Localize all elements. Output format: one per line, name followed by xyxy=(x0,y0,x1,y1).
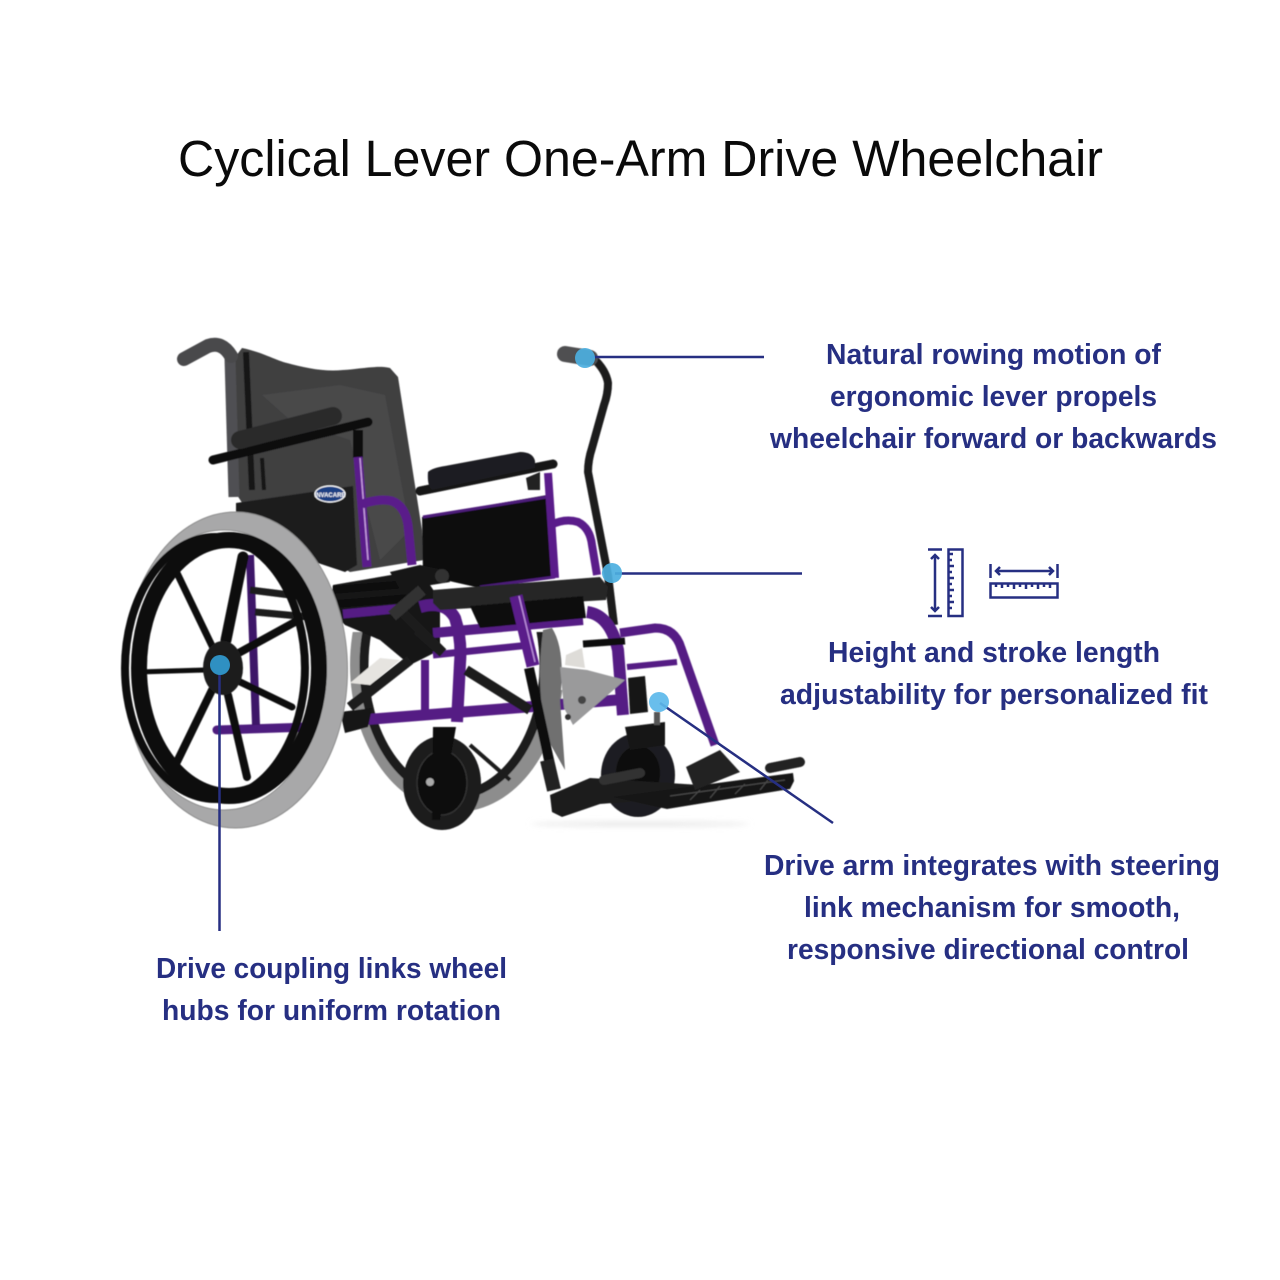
front tube xyxy=(516,596,554,790)
seat back sling panel: INVACARE xyxy=(315,493,345,499)
push handle xyxy=(184,345,234,497)
front caster far xyxy=(601,712,675,817)
drive motor block xyxy=(628,676,648,714)
floor shadow xyxy=(530,822,750,826)
far rear wheel xyxy=(349,631,563,810)
drive lever xyxy=(565,354,614,625)
callout text: drive coupling xyxy=(156,953,507,1027)
callout text: lever: ergonomic lever propels xyxy=(830,381,1157,413)
title: Cyclical Lever One-Arm Drive Wheelchair xyxy=(178,130,1103,187)
callout line: hub xyxy=(218,672,221,931)
near rear wheel xyxy=(124,512,348,828)
callout text: adjustability: Height and stroke length xyxy=(828,637,1160,669)
steering plate xyxy=(540,628,625,770)
callout line: steering link xyxy=(660,703,833,823)
callout text: steering xyxy=(764,850,1220,966)
marker: steering link xyxy=(649,692,669,712)
lower frame joint xyxy=(340,708,372,733)
front caster near xyxy=(403,727,481,830)
icon: horizontal ruler xyxy=(990,564,1058,598)
callout line: adjustment xyxy=(615,572,802,575)
seat back sling panel xyxy=(236,486,357,572)
callout text: lever: Natural rowing motion of xyxy=(826,339,1161,371)
icon: vertical ruler xyxy=(928,550,962,616)
under-seat mechanism xyxy=(330,570,440,665)
callout text: steering: Drive arm integrates with steering xyxy=(764,850,1220,882)
marker: adjustment xyxy=(602,563,622,583)
hub xyxy=(203,641,243,695)
tire xyxy=(124,512,348,828)
marker: hub xyxy=(210,655,230,675)
footrest xyxy=(550,750,800,817)
callout text: steering: link mechanism for smooth, xyxy=(804,892,1180,924)
far armrest and seat panel xyxy=(420,452,597,588)
callout text: adjustability xyxy=(780,637,1208,711)
callout text: lever: wheelchair forward or backwards xyxy=(769,423,1217,455)
near armrest xyxy=(213,416,412,567)
frame tubes xyxy=(217,555,715,745)
callout text: adjustability: adjustability for personalized fit xyxy=(780,679,1208,711)
callout text: drive coupling: hubs for uniform rotation xyxy=(162,995,501,1027)
marker: lever xyxy=(575,348,595,368)
seat xyxy=(390,565,608,628)
callout text: steering: responsive directional control xyxy=(787,934,1189,966)
rim and hand rim xyxy=(125,537,319,799)
white tag xyxy=(350,658,400,685)
wheelchair illustration xyxy=(124,345,800,830)
spokes xyxy=(138,557,295,777)
callout text: drive coupling: Drive coupling links wheel xyxy=(156,953,507,985)
callout text: lever xyxy=(769,339,1217,455)
callout line: lever xyxy=(590,356,764,358)
backrest xyxy=(230,348,424,572)
